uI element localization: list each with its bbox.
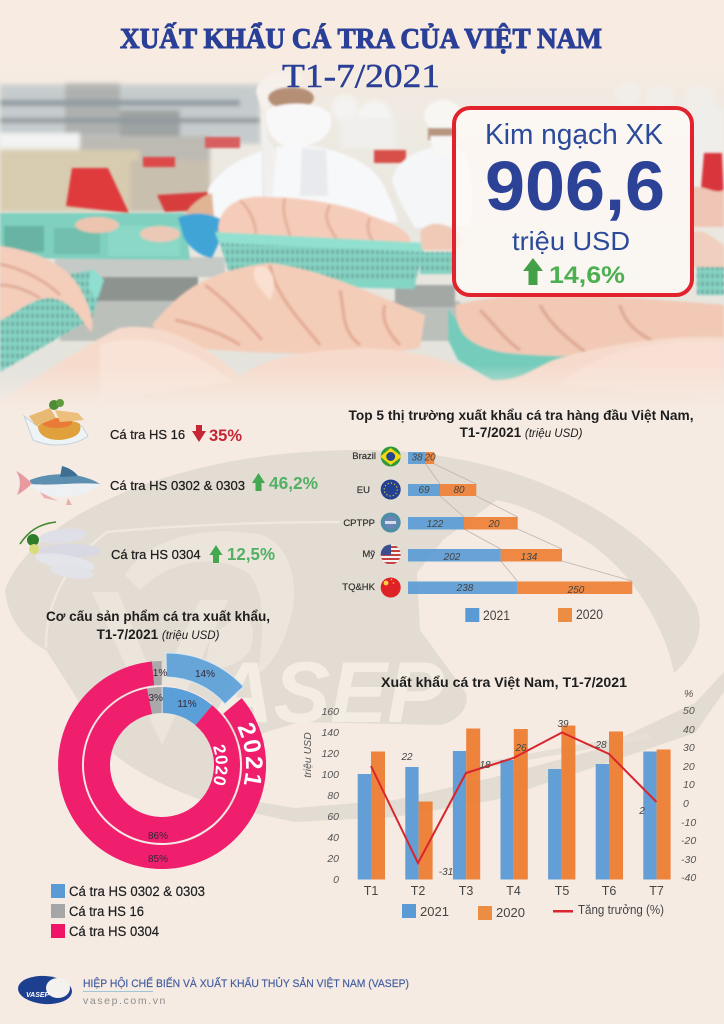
icon: fish cake on plate [24, 399, 88, 445]
callout: export value: triệu USD [512, 226, 630, 256]
worker mask [266, 104, 331, 147]
right axis labels: -20 [681, 835, 696, 847]
growth labels: 18 [479, 760, 491, 771]
legend: monthly chart: 2021 [420, 904, 449, 919]
right basket with fillets [447, 308, 566, 382]
right axis labels [681, 688, 696, 884]
label: ring 2020: 2020 [213, 744, 228, 786]
heading: product structure: Cơ cấu sản phẩm cá tra xuất khẩu, [46, 608, 270, 624]
red crates [66, 168, 129, 213]
heading: top 5 markets: Top 5 thị trường xuất khẩu cá tra hàng đầu Việt Nam, [348, 407, 694, 423]
icon: flag USA [380, 544, 401, 564]
footer: VASEP logo: VASEP [26, 992, 50, 999]
footer: organisation text [83, 977, 409, 1007]
chart: monthly exports with growth line [302, 688, 696, 920]
chart: top 5 markets horizontal stacked bars: Mỹ [362, 549, 375, 560]
foreground fillets [20, 326, 724, 394]
VASEP watermark logo: ASEP [210, 645, 445, 741]
legend: donut [51, 884, 205, 939]
left axis labels: 120 [321, 748, 339, 760]
chart: top 5 markets horizontal stacked bars: EU [357, 485, 370, 496]
heading: top 5 markets: T1-7/2021 (triệu USD) [460, 425, 583, 440]
heading: product structure [46, 608, 270, 642]
bar: EU: 80 [453, 485, 465, 496]
bar: TQ&HK [408, 582, 632, 596]
chart: double donut product structure: 85% [148, 854, 168, 865]
growth line [371, 732, 656, 863]
outer ring 2021 [58, 653, 266, 869]
icon: up arrow [523, 258, 543, 285]
icon: flag Brazil [380, 446, 401, 466]
glove [178, 213, 228, 258]
legend: donut: Cá tra HS 0302 & 0303 [69, 884, 205, 899]
label: ring 2021: 2021 [238, 722, 263, 784]
chart: top 5 markets horizontal stacked bars: Brazil [352, 451, 376, 462]
growth labels: 2 [638, 806, 645, 817]
left axis title: triệu USD [302, 732, 314, 778]
icon: pangasius fish [16, 466, 100, 505]
second worker [392, 148, 452, 228]
month labels: T3 [459, 884, 473, 898]
bar: My: 202 [443, 552, 461, 563]
worker face [268, 87, 314, 109]
right axis labels: 30 [683, 742, 695, 754]
center fish pile [152, 263, 425, 354]
label: HS 0304: 12,5% [227, 544, 275, 564]
left axis labels: 60 [327, 811, 339, 823]
growth labels: -31 [439, 867, 453, 878]
chart: top 5 markets horizontal stacked bars: TQ&HK [342, 582, 376, 593]
title [120, 23, 602, 95]
icon: flag China [381, 578, 401, 598]
left axis labels: 20 [326, 853, 339, 865]
icon: up arrow [252, 473, 265, 491]
side fillets [420, 224, 462, 250]
chart: double donut product structure [58, 652, 266, 869]
heading: product structure: T1-7/2021 (triệu USD) [97, 627, 220, 642]
left axis labels: 140 [321, 727, 339, 739]
fillets held in basket [218, 197, 411, 246]
callout: export value: 14,6% [549, 262, 625, 289]
bar: Brazil [408, 452, 436, 464]
month labels: T5 [555, 884, 569, 898]
bar: CPTPP: 20 [487, 519, 500, 530]
growth labels: 22 [400, 752, 413, 763]
label: HS 0302 & 0303: 46,2% [269, 473, 318, 493]
worker coat [208, 145, 398, 222]
right axis labels: 10 [683, 779, 695, 791]
label: HS 16: Cá tra HS 16 [110, 427, 185, 442]
label: HS 0302 & 0303 [110, 473, 318, 493]
bar: EU [408, 484, 476, 496]
heading: monthly chart: Xuất khẩu cá tra Việt Nam, T1-7/2021 [381, 674, 627, 690]
legend: top 5 chart: 2021 [483, 607, 510, 623]
left axis labels: 40 [327, 832, 339, 844]
left axis labels: 100 [321, 769, 339, 781]
left axis labels [321, 706, 339, 886]
chart: double donut product structure: 14% [195, 669, 215, 680]
chart: double donut product structure: 11% [177, 699, 197, 710]
bars 2020 [371, 726, 671, 880]
worker hat [255, 78, 300, 108]
month labels: T6 [602, 884, 616, 898]
bars 2021 [358, 751, 657, 880]
conveyor [55, 257, 225, 277]
bar: TQ&HK: 238 [456, 583, 474, 594]
chart: double donut product structure: 86% [148, 831, 168, 842]
title: T1-7/2021 [282, 58, 440, 95]
rear teal baskets [0, 213, 190, 260]
icon: up arrow [210, 545, 222, 563]
month labels: T7 [649, 884, 664, 898]
bar: Brazil: 38 [411, 452, 423, 464]
right axis labels: -30 [681, 854, 696, 866]
left axis labels: 80 [327, 790, 339, 802]
footer: organisation text: vasep.com.vn [83, 995, 167, 1007]
growth labels: 26 [514, 743, 527, 754]
legend: donut: Cá tra HS 0304 [69, 924, 159, 939]
icon: CPTPP badge [381, 512, 401, 532]
icon: flag EU [381, 480, 401, 500]
label: HS 16: 35% [209, 427, 242, 445]
bar: CPTPP [408, 517, 518, 530]
right axis labels: 0 [683, 798, 689, 810]
right axis labels: -40 [681, 872, 696, 884]
label: HS 16 [110, 425, 242, 445]
bar: My [408, 549, 562, 563]
month labels: T2 [411, 884, 425, 898]
right axis labels: -10 [681, 817, 696, 829]
inner ring 2020 [84, 687, 240, 843]
label: HS 0304: Cá tra HS 0304 [111, 547, 201, 562]
growth labels: 28 [594, 740, 607, 751]
callout: export value [454, 108, 692, 295]
heading: top 5 markets [348, 407, 694, 440]
left basket [0, 270, 104, 372]
right axis labels: 20 [682, 761, 695, 773]
month labels: T4 [506, 884, 521, 898]
callout: export value: 906,6 [485, 147, 665, 225]
chart: top 5 markets horizontal stacked bars [342, 446, 632, 623]
bar: Brazil: 20 [423, 452, 436, 464]
legend: top 5 chart: 2020 [576, 606, 603, 622]
label: HS 0302 & 0303: Cá tra HS 0302 & 0303 [110, 478, 245, 493]
chart: double donut product structure: 1% [153, 668, 167, 679]
month labels: T1 [364, 884, 378, 898]
bar: TQ&HK: 250 [567, 585, 585, 596]
hero photo: fish processing factory [0, 80, 724, 394]
chart: top 5 markets horizontal stacked bars: CPTPP [343, 518, 375, 529]
left fillet [0, 246, 92, 332]
month labels [364, 884, 664, 898]
footer: organisation text: HIỆP HỘI CHẾ BIẾN VÀ XUẤT KHẨU THỦY SẢN VIỆT NAM (VASEP) [83, 977, 409, 990]
label: HS 0304 [111, 544, 275, 564]
main basket [219, 242, 422, 284]
footer: VASEP logo [17, 974, 73, 1006]
growth labels: 39 [557, 719, 569, 730]
title: XUẤT KHẨU CÁ TRA CỦA VIỆT NAM [120, 23, 602, 55]
bar: CPTPP: 122 [427, 519, 444, 530]
VASEP watermark logo [5, 450, 724, 822]
chart: double donut product structure: 3% [148, 693, 163, 704]
bar: My: 134 [521, 552, 538, 563]
bar: EU: 69 [418, 485, 430, 496]
right axis labels: % [684, 688, 693, 700]
right axis labels: 50 [683, 705, 695, 717]
icon: down arrow [192, 425, 206, 442]
icon: fish fillets with herbs [20, 522, 101, 581]
legend: monthly chart [402, 903, 664, 920]
back hall [0, 84, 260, 144]
legend: monthly chart: 2020 [496, 905, 525, 920]
callout: export value: Kim ngạch XK [485, 119, 664, 151]
right axis labels: 40 [683, 724, 695, 736]
legend: top 5 chart [465, 606, 603, 623]
left axis labels: 160 [321, 706, 339, 718]
legend: donut: Cá tra HS 16 [69, 904, 144, 919]
growth labels [400, 719, 645, 878]
legend: monthly chart: Tăng trưởng (%) [578, 903, 664, 917]
left axis labels: 0 [333, 874, 339, 886]
